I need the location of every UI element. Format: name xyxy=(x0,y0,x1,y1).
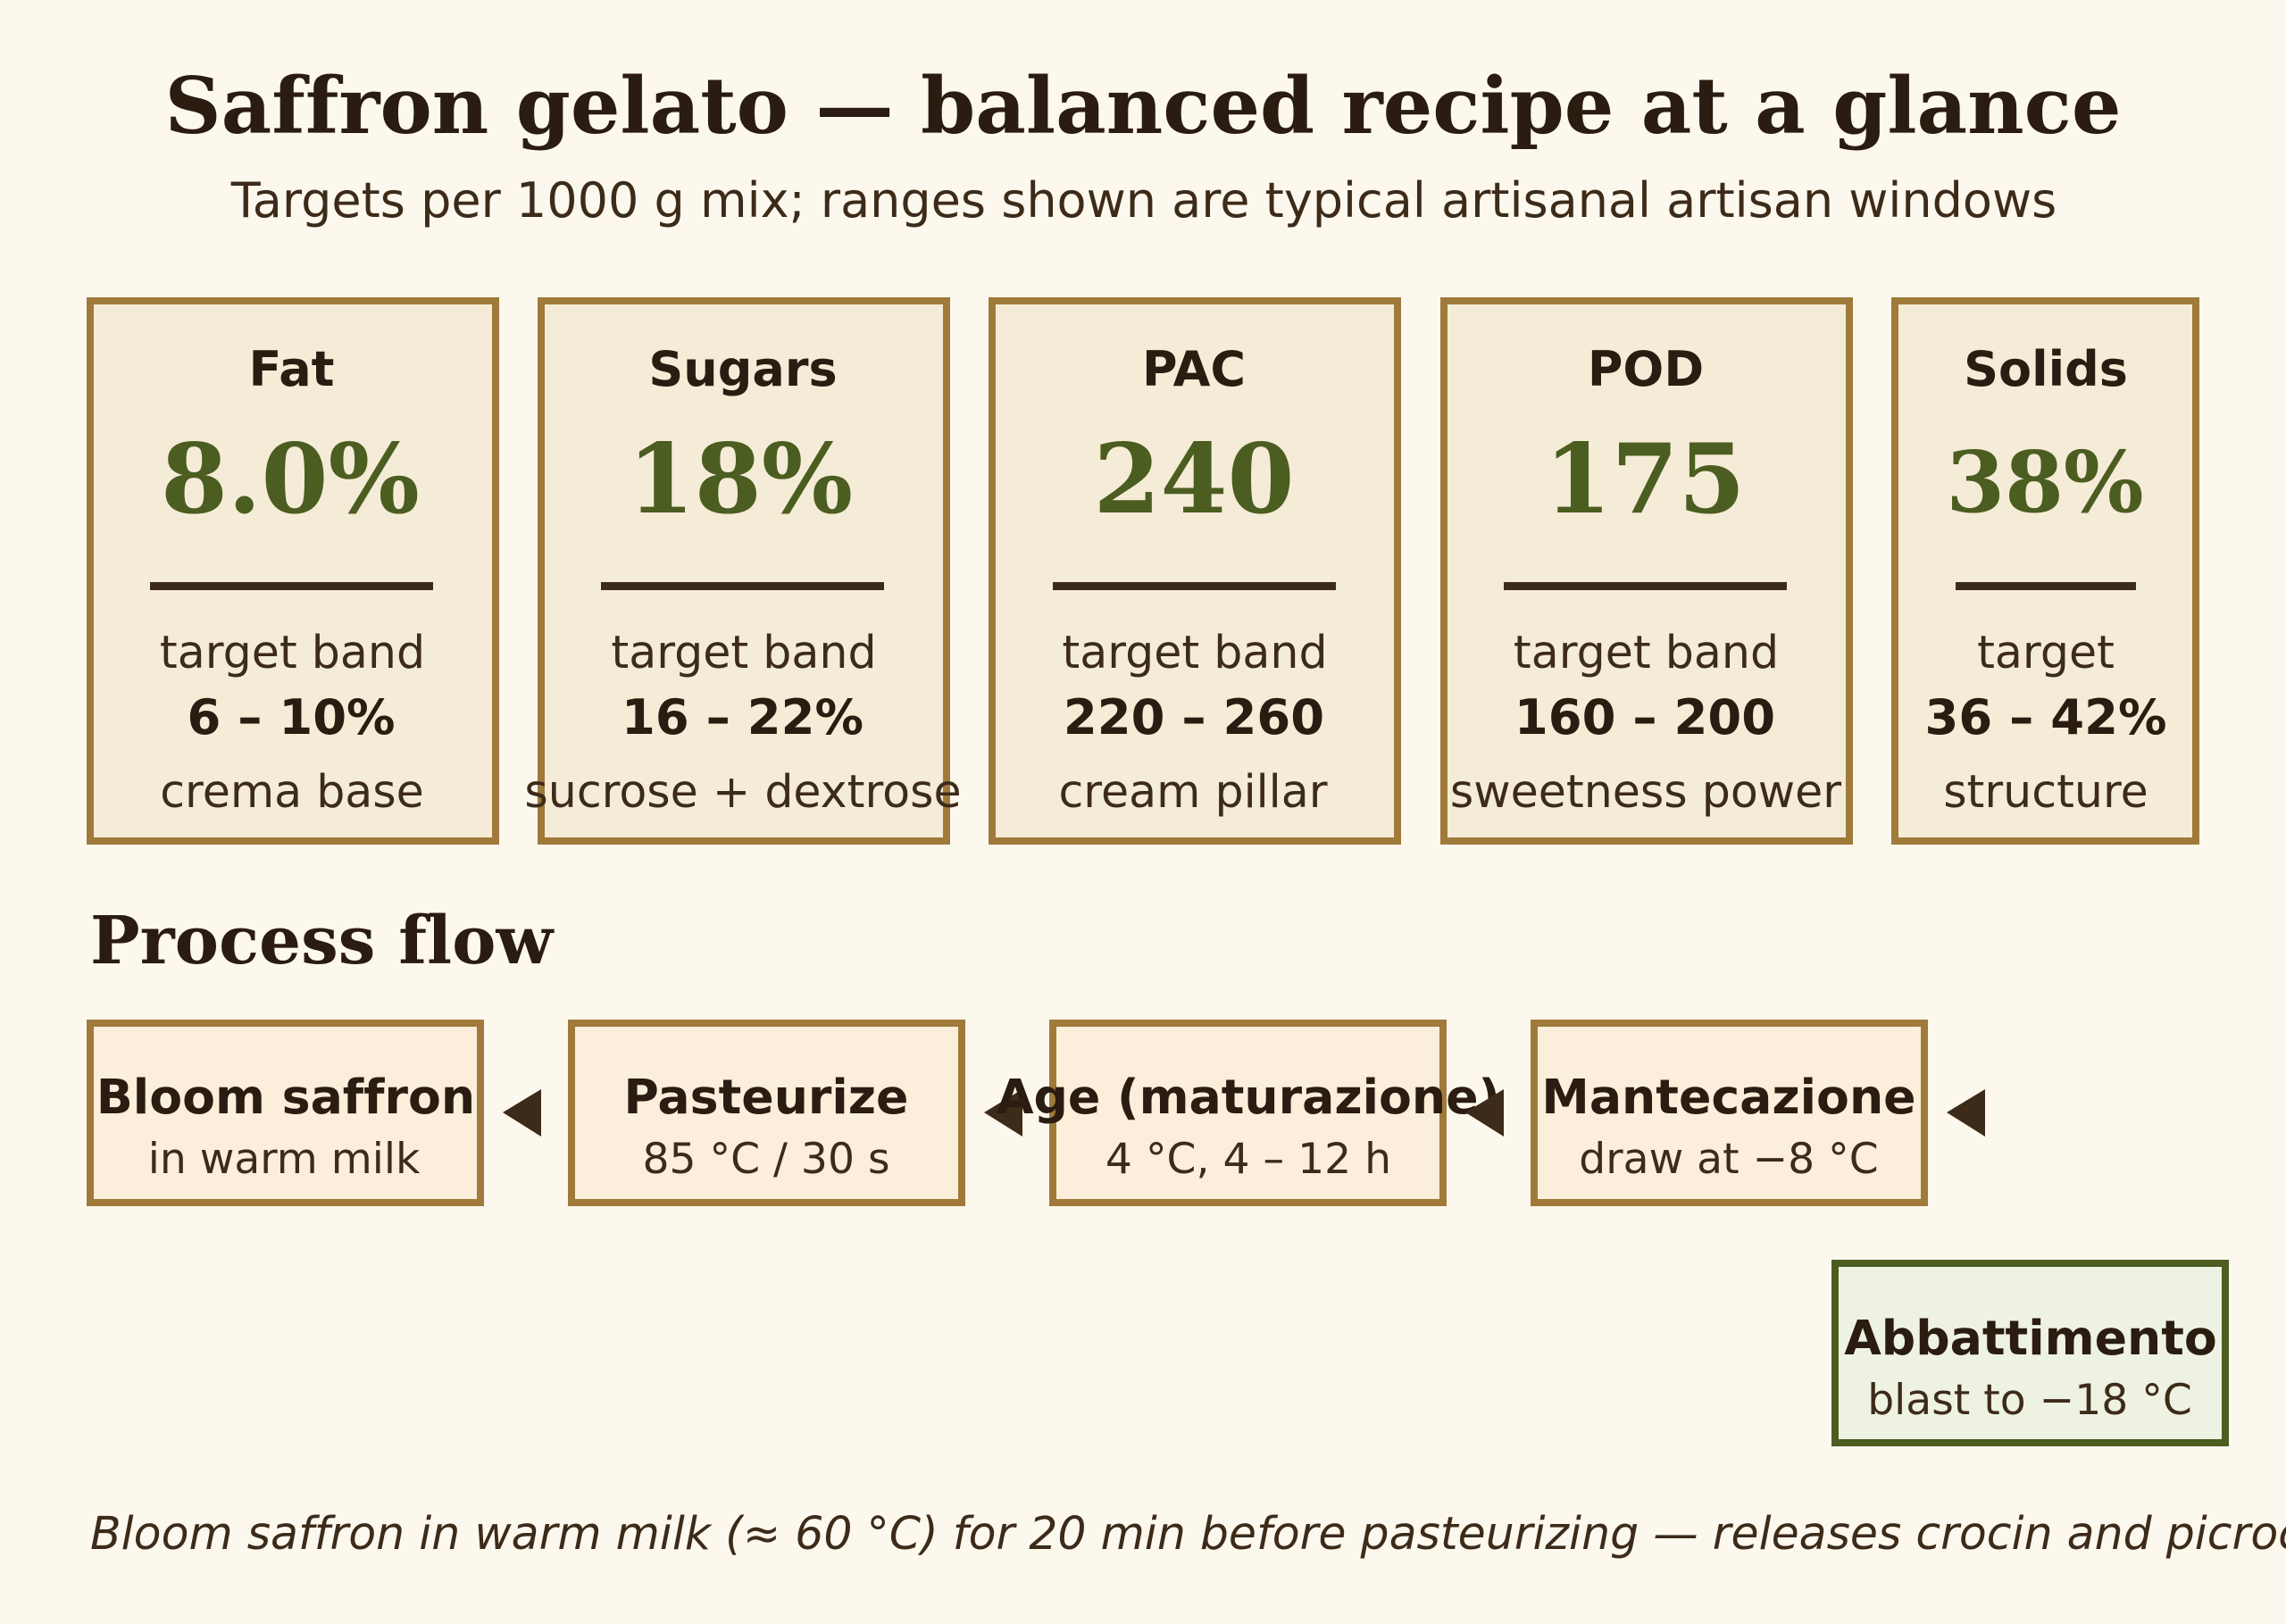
step: pasteurize xyxy=(572,1023,962,1203)
panel: POD card: target band xyxy=(1514,626,1779,679)
panel: solids card xyxy=(1895,301,2196,841)
panel: POD card: 175 xyxy=(1544,423,1746,536)
step: pasteurize: 85 °C / 30 s xyxy=(642,1135,890,1184)
panel: sugars card: sucrose + dextrose xyxy=(524,765,962,818)
panel: sugars card: target band xyxy=(611,626,877,679)
panel: fat card: crema base xyxy=(160,765,424,818)
step: mantecazione: draw at −8 °C xyxy=(1579,1135,1879,1184)
step: age: Age (maturazione) xyxy=(997,1069,1500,1125)
step: age: 4 °C, 4 – 12 h xyxy=(1105,1135,1391,1184)
panel: POD card: POD xyxy=(1588,341,1704,397)
panel: POD card: 160 – 200 xyxy=(1514,689,1775,745)
panel: fat card: 6 – 10% xyxy=(187,689,396,745)
step: abbattimento xyxy=(1835,1263,2225,1443)
panel: sugars card: Sugars xyxy=(648,341,838,397)
step: pasteurize: Pasteurize xyxy=(624,1069,908,1125)
panel: solids card: structure xyxy=(1943,765,2148,818)
arrow xyxy=(1465,1089,1504,1137)
panel: PAC card xyxy=(992,301,1397,841)
panel: sugars card xyxy=(524,301,962,841)
step: abbattimento: blast to −18 °C xyxy=(1867,1376,2192,1425)
panel: fat card: target band xyxy=(160,626,425,679)
panel: fat card xyxy=(90,301,496,841)
panel: sugars card: 16 – 22% xyxy=(622,689,864,745)
step: mantecazione xyxy=(1534,1023,1924,1203)
step: bloom saffron xyxy=(90,1023,480,1203)
panel: fat card: 8.0% xyxy=(161,423,420,536)
panel: PAC card: PAC xyxy=(1142,341,1246,397)
panel: sugars card: 18% xyxy=(628,423,853,536)
panel: POD card xyxy=(1444,301,1849,841)
step: abbattimento: Abbattimento xyxy=(1844,1310,2217,1366)
panel: PAC card: cream pillar xyxy=(1058,765,1328,818)
panel: solids card: target xyxy=(1977,626,2115,679)
panel: solids card: Solids xyxy=(1964,341,2128,397)
step: bloom saffron: in warm milk xyxy=(148,1135,421,1184)
panel: PAC card: target band xyxy=(1062,626,1328,679)
panel: POD card: sweetness power xyxy=(1450,765,1841,818)
heading: process flow: Process flow xyxy=(90,903,555,979)
subtitle: Targets per 1000 g mix; ranges shown are typical artisanal artisan windows xyxy=(230,172,2057,229)
panel: solids card: 38% xyxy=(1946,433,2144,532)
panel: fat card: Fat xyxy=(249,341,334,397)
panel: PAC card: 240 xyxy=(1093,423,1295,536)
step: age xyxy=(997,1023,1500,1203)
arrow xyxy=(1947,1089,1985,1137)
step: bloom saffron: Bloom saffron xyxy=(96,1069,475,1125)
panel: PAC card: 220 – 260 xyxy=(1064,689,1324,745)
arrow xyxy=(503,1089,541,1137)
arrow xyxy=(984,1089,1022,1137)
step: mantecazione: Mantecazione xyxy=(1541,1069,1916,1125)
panel: solids card: 36 – 42% xyxy=(1925,689,2166,745)
title: Saffron gelato — balanced recipe at a glance xyxy=(164,60,2122,152)
